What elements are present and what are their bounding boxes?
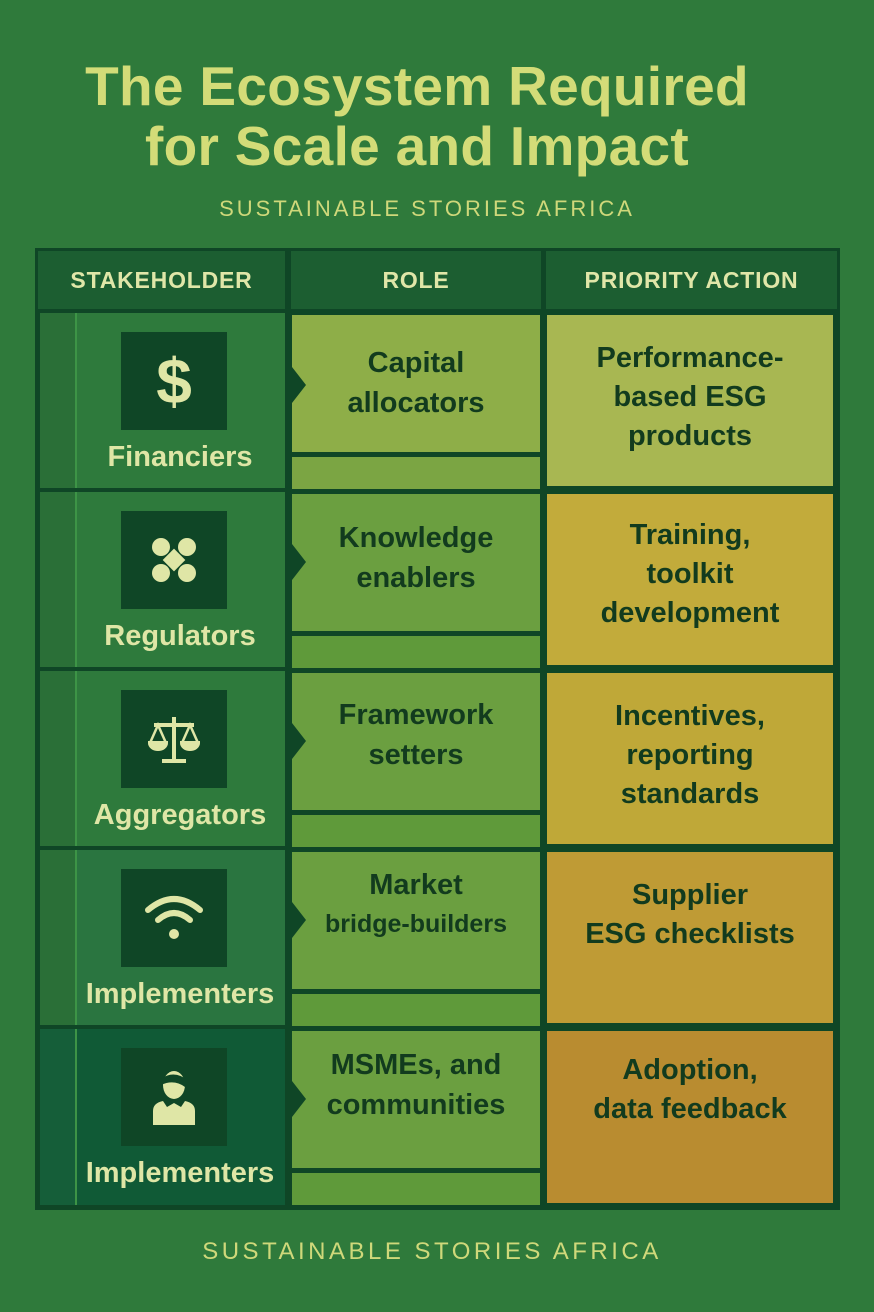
row 1 priority: [547, 315, 833, 486]
row 4 priority: ESG checklists: [585, 918, 795, 950]
row 4 role: [292, 852, 540, 1026]
row 5 role: [292, 1031, 540, 1205]
row 5 priority: Adoption,: [622, 1054, 758, 1086]
icon: wifi: [121, 869, 227, 967]
table: [35, 248, 840, 1210]
row 2 role: Knowledge: [339, 522, 493, 554]
row 3 priority: standards: [621, 778, 759, 810]
title: for Scale and Impact: [145, 115, 689, 177]
row 2 priority: development: [601, 597, 779, 629]
row 2 stakeholder: [40, 492, 285, 667]
row 5 priority: data feedback: [593, 1093, 787, 1125]
row 5 stakeholder: Implementers: [86, 1157, 274, 1189]
row 1 stakeholder: [40, 313, 285, 488]
row 3 priority: reporting: [626, 739, 754, 771]
row 4 role: Market: [369, 869, 463, 901]
row 2 stakeholder: Regulators: [104, 620, 256, 652]
row 1 stakeholder: Financiers: [107, 441, 253, 473]
row 4 priority: [547, 852, 833, 1023]
row 4 stakeholder: Implementers: [86, 978, 274, 1010]
header: stakeholder: STAKEHOLDER: [70, 266, 253, 292]
row 1 role: Capital: [368, 347, 464, 379]
header: priority action: [546, 251, 837, 309]
row 3 role: [292, 673, 540, 847]
icon: dollar: $: [156, 345, 192, 417]
row 1 priority: Performance-: [597, 342, 783, 374]
row 2 priority: [547, 494, 833, 665]
row 2 role: [292, 494, 540, 668]
arrow: [292, 1081, 306, 1117]
row 3 priority: [547, 673, 833, 844]
row 3 role: setters: [368, 739, 464, 771]
row 1 priority: products: [628, 420, 752, 452]
title: The Ecosystem Required: [85, 55, 749, 117]
row 1 role: allocators: [348, 387, 484, 419]
row 4 role: bridge-builders: [325, 910, 507, 938]
header: role: ROLE: [382, 266, 450, 292]
row 2 priority: toolkit: [646, 558, 734, 590]
row 3 stakeholder: Aggregators: [94, 799, 266, 831]
row 5 priority: [547, 1031, 833, 1203]
row 5 stakeholder: [40, 1029, 285, 1205]
row 1 role: [292, 315, 540, 489]
icon: network: [121, 511, 227, 609]
row 2 priority: Training,: [630, 519, 750, 551]
title: [85, 55, 749, 177]
row 3 priority: Incentives,: [615, 700, 765, 732]
header: role: [291, 251, 541, 309]
row 4 priority: Supplier: [632, 879, 748, 911]
icon: dollar: [121, 332, 227, 430]
arrow: [292, 544, 306, 580]
row 1 priority: based ESG: [613, 381, 767, 413]
subtitle: SUSTAINABLE STORIES AFRICA: [219, 196, 635, 221]
arrow: [292, 723, 306, 759]
row 4 stakeholder: [40, 850, 285, 1025]
icon: scales: [121, 690, 227, 788]
row 5 role: MSMEs, and: [331, 1049, 501, 1081]
header: stakeholder: [38, 251, 285, 309]
arrow: [292, 902, 306, 938]
row 2 role: enablers: [356, 562, 476, 594]
footer: SUSTAINABLE STORIES AFRICA: [202, 1238, 662, 1265]
header: priority action: PRIORITY ACTION: [585, 266, 798, 292]
icon: person: [121, 1048, 227, 1146]
row 3 stakeholder: [40, 671, 285, 846]
row 3 role: Framework: [339, 699, 493, 731]
arrow: [292, 367, 306, 403]
row 5 role: communities: [327, 1089, 505, 1121]
